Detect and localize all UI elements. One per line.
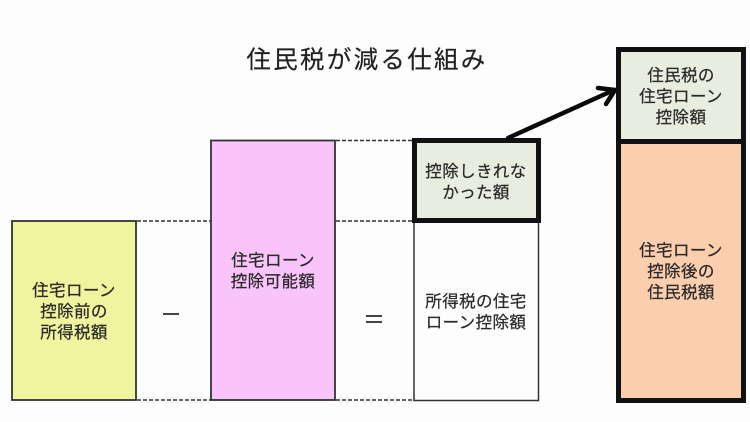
resident tax loan deduction: 住宅ローン	[639, 87, 723, 106]
panel: income tax loan deduction	[414, 221, 538, 400]
panel: income tax before deduction	[12, 221, 136, 400]
resident tax after deduction: 住民税額	[647, 283, 715, 302]
panel: amount not deducted	[414, 140, 538, 220]
arrow	[508, 88, 615, 138]
minus sign	[163, 313, 179, 315]
resident tax after deduction	[618, 142, 744, 400]
panel: income tax before deduction: 住宅ローン	[32, 281, 116, 300]
panel: deductible loan amount	[211, 140, 335, 400]
panel: income tax loan deduction: 所得税の住宅	[425, 292, 527, 311]
panel: income tax before deduction: 控除前の	[40, 302, 108, 321]
panel: deductible loan amount: 控除可能額	[231, 272, 315, 291]
resident tax after deduction: 住宅ローン	[639, 241, 723, 260]
resident tax loan deduction: 控除額	[656, 108, 706, 127]
resident tax after deduction: 控除後の	[647, 262, 715, 281]
panel: amount not deducted: かった額	[442, 183, 510, 202]
resident tax loan deduction: 住民税の	[647, 66, 715, 85]
panel: amount not deducted: 控除しきれな	[425, 162, 527, 181]
panel: resident tax after deduction stack	[618, 50, 744, 400]
dashed guide lines	[137, 140, 414, 400]
panel: income tax loan deduction: ローン控除額	[426, 313, 526, 332]
resident tax loan deduction	[618, 50, 744, 142]
equals sign	[366, 315, 382, 323]
panel: deductible loan amount: 住宅ローン	[231, 251, 315, 270]
panel: income tax before deduction: 所得税額	[40, 323, 108, 342]
title: 住民税が減る仕組み	[246, 46, 488, 74]
